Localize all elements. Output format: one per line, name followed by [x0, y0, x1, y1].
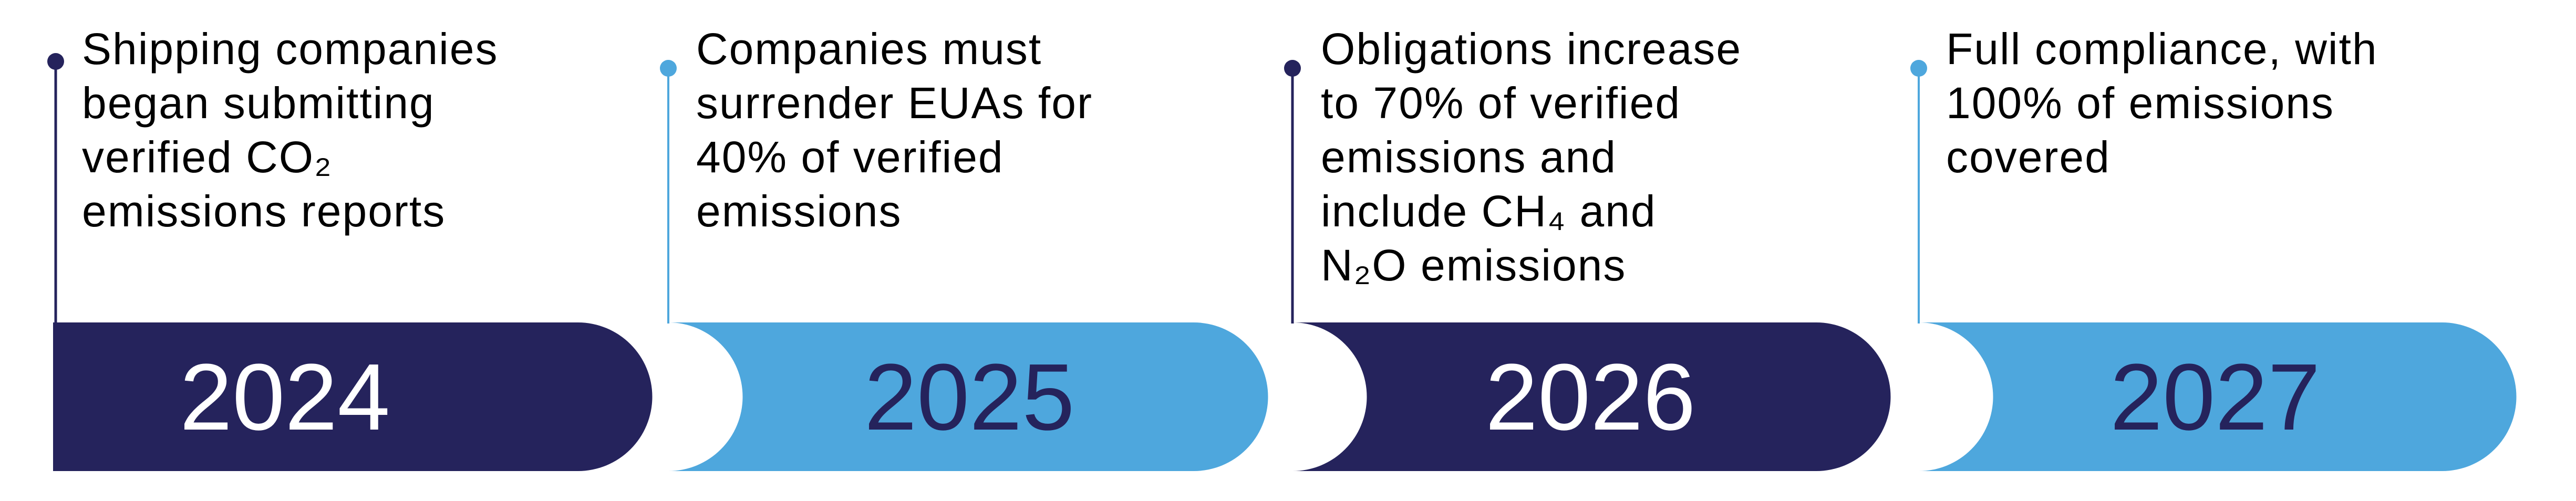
connector line 2024: [55, 61, 57, 323]
text block 2025: Companies must: [696, 24, 1042, 74]
text block 2026: include CH₄ and: [1321, 186, 1657, 236]
icon: dot 2025: [660, 60, 677, 77]
text block 2026: to 70% of verified: [1321, 78, 1681, 128]
text block 2027: Full compliance, with: [1946, 24, 2378, 74]
text block 2025: 40% of verified: [696, 132, 1004, 182]
panel: 2026: [1284, 24, 1890, 471]
text block 2024: Shipping companies: [82, 24, 498, 74]
text block 2024: verified CO₂: [82, 132, 333, 182]
year bar 2024: [53, 322, 653, 471]
year bar 2026: [1292, 322, 1890, 471]
panel: 2027: [1910, 24, 2517, 471]
text block 2026: emissions and: [1321, 132, 1617, 182]
year label 2027: 2027: [2110, 345, 2320, 450]
text block 2027: covered: [1946, 132, 2111, 182]
text block 2026: Obligations increase: [1321, 24, 1742, 74]
text block 2024: emissions reports: [82, 186, 446, 236]
connector line 2027: [1918, 68, 1920, 323]
text block 2024: began submitting: [82, 78, 435, 128]
year label 2024: 2024: [180, 345, 390, 450]
year label 2025: 2025: [864, 345, 1074, 450]
connector line 2025: [667, 68, 669, 323]
year label 2026: 2026: [1485, 345, 1695, 450]
text block 2025: emissions: [696, 186, 902, 236]
icon: dot 2026: [1284, 60, 1301, 77]
text block 2026: N₂O emissions: [1321, 241, 1626, 290]
connector line 2026: [1291, 68, 1294, 323]
icon: dot 2024: [47, 53, 64, 70]
text block 2027: 100% of emissions: [1946, 78, 2334, 128]
panel: 2025: [660, 24, 1268, 471]
panel: 2024: [47, 24, 653, 471]
text block 2025: surrender EUAs for: [696, 78, 1093, 128]
year bar 2027: [1919, 322, 2517, 471]
icon: dot 2027: [1910, 60, 1927, 77]
year bar 2025: [668, 322, 1268, 471]
